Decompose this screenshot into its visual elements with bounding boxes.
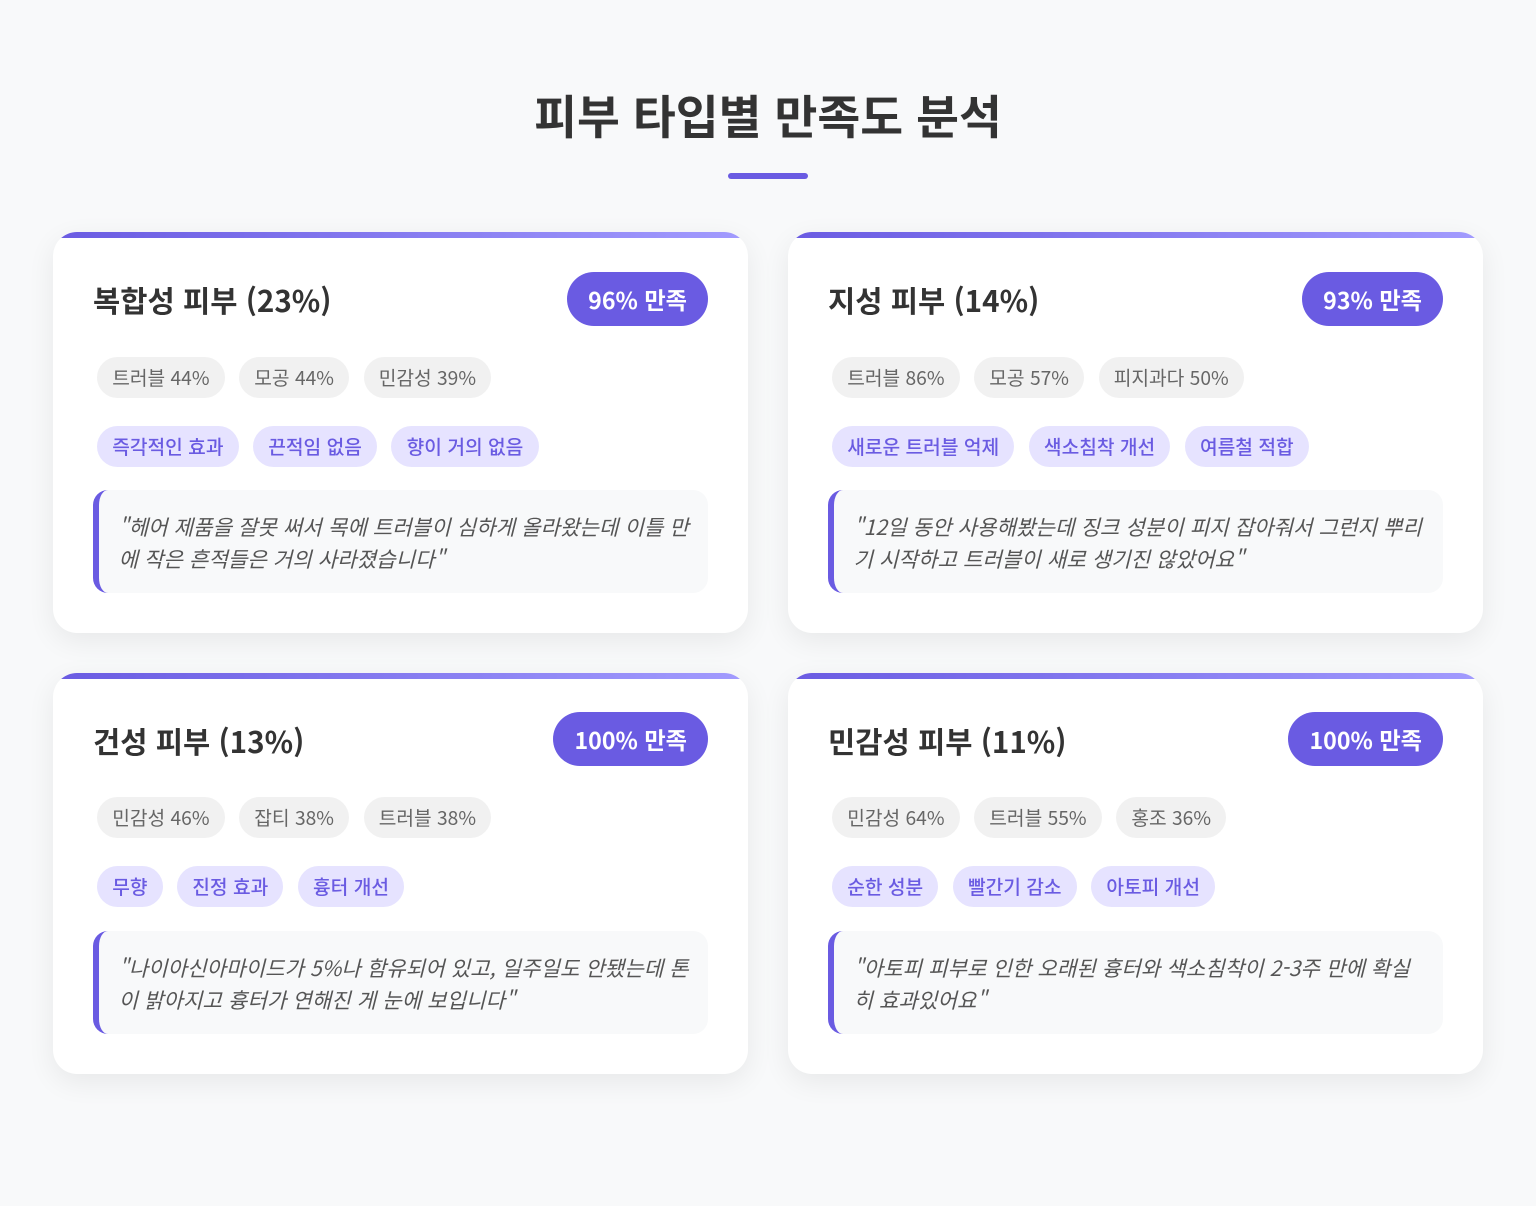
concern tags: 민감성 46% — [112, 803, 210, 831]
concern tags: 트러블 86% — [847, 363, 944, 391]
title underline — [728, 173, 808, 179]
benefit tags — [97, 426, 539, 467]
heading: combination skin: 복합성 피부 (23%) — [93, 278, 332, 321]
satisfaction badge — [1288, 712, 1443, 766]
review quote: "12일 동안 사용해봤는데 징크 성분이 피지 잡아줘서 그런지 뿌리기 시작하고 트러블이 새로 생기진 않았어요" — [854, 511, 1422, 574]
benefit tags: 색소침착 개선 — [1044, 432, 1155, 460]
panel: dry skin — [53, 673, 748, 1074]
benefit tags — [832, 426, 1309, 467]
heading: dry skin: 건성 피부 (13%) — [93, 719, 304, 762]
satisfaction badge: 100% 만족 — [574, 722, 687, 756]
benefit tags: 순한 성분 — [847, 872, 923, 900]
satisfaction badge: 93% 만족 — [1323, 282, 1422, 316]
benefit tags: 빨간기 감소 — [968, 872, 1062, 900]
concern tags: 트러블 38% — [379, 803, 476, 831]
concern tags: 피지과다 50% — [1114, 363, 1229, 391]
concern tags: 트러블 44% — [112, 363, 210, 391]
benefit tags: 무향 — [112, 872, 148, 900]
benefit tags — [832, 866, 1215, 907]
heading: oily skin: 지성 피부 (14%) — [828, 278, 1039, 321]
review quote — [93, 490, 708, 593]
concern tags: 트러블 55% — [989, 803, 1087, 831]
benefit tags: 진정 효과 — [192, 872, 268, 900]
benefit tags: 즉각적인 효과 — [112, 432, 223, 460]
panel: combination skin — [53, 232, 748, 633]
satisfaction badge: 100% 만족 — [1309, 722, 1422, 756]
benefit tags: 향이 거의 없음 — [407, 432, 523, 460]
concern tags: 홍조 36% — [1131, 803, 1211, 831]
concern tags — [97, 797, 491, 838]
heading: sensitive skin: 민감성 피부 (11%) — [828, 719, 1066, 762]
review quote: "나이아신아마이드가 5%나 함유되어 있고, 일주일도 안됐는데 톤이 밝아지고 흉터가 연해진 게 눈에 보입니다" — [118, 952, 689, 1015]
review quote: "아토피 피부로 인한 오래된 흉터와 색소침착이 2-3주 만에 확실 — [854, 952, 1410, 983]
panel: oily skin — [788, 232, 1483, 633]
satisfaction badge — [1302, 272, 1443, 326]
benefit tags: 아토피 개선 — [1106, 872, 1200, 900]
satisfaction badge — [567, 272, 708, 326]
title: 피부 타입별 만족도 분석 — [534, 81, 1002, 148]
concern tags — [832, 797, 1226, 838]
benefit tags: 여름철 적합 — [1200, 432, 1294, 460]
concern tags: 민감성 64% — [847, 803, 944, 831]
review quote — [828, 490, 1443, 593]
benefit tags: 흉터 개선 — [313, 872, 389, 900]
benefit tags: 새로운 트러블 억제 — [847, 432, 999, 460]
review quote: "헤어 제품을 잘못 써서 목에 트러블이 심하게 올라왔는데 이틀 만에 작은 흔적들은 거의 사라졌습니다" — [118, 511, 689, 574]
review quote: 히 효과있어요" — [854, 984, 986, 1015]
concern tags — [97, 357, 491, 398]
concern tags: 민감성 39% — [379, 363, 476, 391]
benefit tags — [97, 866, 404, 907]
review quote — [828, 931, 1443, 1034]
benefit tags: 끈적임 없음 — [268, 432, 362, 460]
concern tags: 모공 44% — [254, 363, 334, 391]
review quote — [93, 931, 708, 1034]
satisfaction badge — [553, 712, 708, 766]
concern tags: 모공 57% — [989, 363, 1069, 391]
concern tags: 잡티 38% — [254, 803, 334, 831]
satisfaction badge: 96% 만족 — [588, 282, 687, 316]
panel: sensitive skin — [788, 673, 1483, 1074]
concern tags — [832, 357, 1244, 398]
